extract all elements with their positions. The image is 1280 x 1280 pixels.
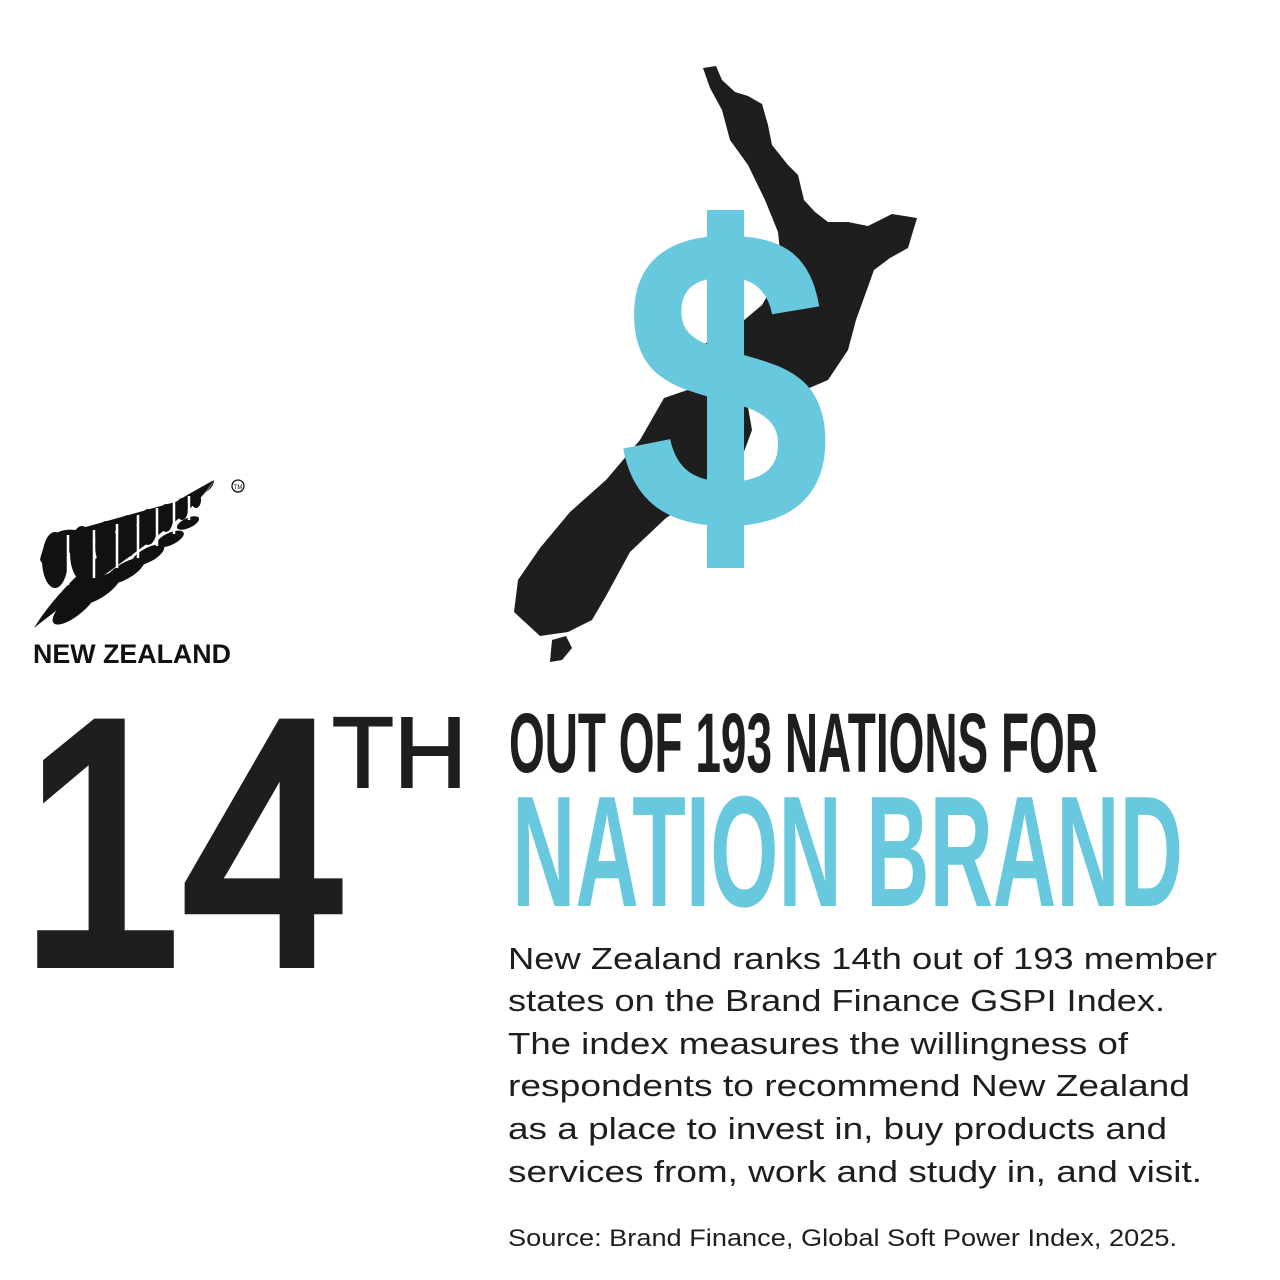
body text: states on the Brand Finance GSPI Index. (508, 983, 1165, 1018)
fern (34, 480, 214, 631)
icon: dollar sign: S (614, 151, 838, 609)
body text: New Zealand ranks 14th out of 193 member (508, 941, 1217, 976)
body text: services from, work and study in, and visit. (508, 1154, 1202, 1189)
body text: as a place to invest in, buy products and (508, 1111, 1167, 1146)
source: Source: Brand Finance, Global Soft Power Index, 2025. (508, 1225, 1177, 1252)
map: New Zealand (514, 66, 917, 662)
logo: fern New Zealand (33, 480, 244, 669)
body text: respondents to recommend New Zealand (508, 1068, 1190, 1103)
trademark (232, 480, 244, 492)
trademark: TM (234, 485, 242, 491)
body text (508, 941, 1217, 1189)
ordinal TH: TH (332, 697, 467, 809)
body text: The index measures the willingness of (508, 1026, 1128, 1061)
rank number 14: 14 (20, 651, 346, 1036)
logo text: NEW ZEALAND (33, 639, 231, 669)
